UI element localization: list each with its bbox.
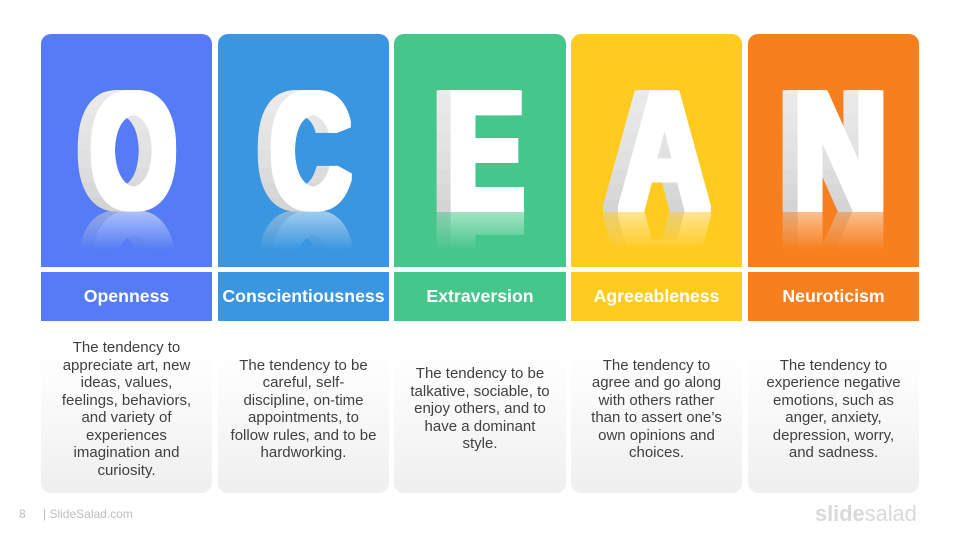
text block: Extraversion description: talkative, sociable, to bbox=[410, 383, 550, 400]
text block: Neuroticism description: and sadness. bbox=[789, 444, 878, 461]
text block: Neuroticism description: The tendency to bbox=[780, 356, 887, 374]
page number: 8 bbox=[19, 507, 26, 521]
text block: Extraversion description: have a dominant bbox=[425, 418, 535, 435]
letter C with reflection: C bbox=[270, 58, 351, 242]
letter N with reflection: N bbox=[793, 57, 888, 245]
text block: Agreeableness description: with others rather bbox=[599, 392, 714, 408]
text block: Agreeableness description: own opinions and bbox=[598, 426, 715, 444]
text block: Conscientiousness description: hardworking. bbox=[261, 444, 346, 461]
text block: Conscientiousness description: follow rules, and to be bbox=[231, 426, 376, 444]
text block: Openness description: appreciate art, new bbox=[63, 356, 190, 374]
text block: Conscientiousness description bbox=[218, 325, 389, 493]
text block: Openness description: imagination and bbox=[74, 444, 179, 461]
text block: Agreeableness description bbox=[571, 325, 742, 493]
heading: Openness bbox=[41, 272, 212, 321]
text block: Agreeableness description: choices. bbox=[629, 444, 684, 461]
text block: Openness description: and variety of bbox=[81, 409, 172, 426]
text block: Conscientiousness description: careful, self- bbox=[263, 374, 344, 391]
heading: Agreeableness bbox=[571, 272, 742, 321]
text block: Extraversion description: enjoy others, and to bbox=[414, 400, 546, 417]
text block: Extraversion description bbox=[394, 325, 566, 493]
letter A with reflection: A bbox=[619, 57, 710, 245]
panel: Openness letter card bbox=[41, 34, 212, 267]
panel: Extraversion letter card bbox=[394, 34, 566, 267]
text block: Openness description: The tendency to bbox=[73, 339, 180, 356]
text block: Extraversion description: The tendency to be bbox=[416, 365, 544, 382]
heading: Neuroticism bbox=[748, 272, 919, 321]
heading: Agreeableness: Agreeableness bbox=[594, 286, 719, 306]
panel: Agreeableness letter card bbox=[571, 34, 742, 267]
heading: Extraversion bbox=[394, 272, 566, 321]
heading: Conscientiousness: Conscientiousness bbox=[222, 286, 385, 306]
text block: Extraversion description: style. bbox=[462, 435, 498, 452]
text block: Openness description: ideas, values, bbox=[81, 374, 172, 391]
heading: Conscientiousness bbox=[218, 272, 389, 321]
text block: Neuroticism description: experience negative bbox=[766, 374, 901, 391]
text block: Neuroticism description: anger, anxiety, bbox=[785, 409, 882, 426]
text block: Neuroticism description: depression, worry, bbox=[773, 426, 894, 444]
text block: Agreeableness description: agree and go along bbox=[592, 374, 721, 391]
text block: Openness description bbox=[41, 325, 212, 493]
letter E with reflection: E bbox=[447, 57, 525, 245]
text block: Agreeableness description: than to assert one’s bbox=[591, 409, 722, 426]
text block: Conscientiousness description: appointments, to bbox=[248, 409, 359, 426]
text block: Conscientiousness description: discipline, on-time bbox=[243, 392, 364, 408]
text block: Neuroticism description: emotions, such as bbox=[773, 392, 894, 408]
text block: Agreeableness description: The tendency to bbox=[603, 356, 710, 374]
footer: source: | SlideSalad.com bbox=[43, 507, 133, 521]
text block: Conscientiousness description: The tendency to be bbox=[239, 356, 368, 374]
text block: Neuroticism description bbox=[748, 325, 919, 493]
text block: Openness description: experiences bbox=[86, 426, 167, 444]
logo: slidesalad: slidesalad bbox=[815, 501, 917, 526]
heading: Extraversion: Extraversion bbox=[426, 286, 534, 306]
panel: Conscientiousness letter card bbox=[218, 34, 389, 267]
text block: Openness description: curiosity. bbox=[97, 462, 156, 478]
heading: Neuroticism: Neuroticism bbox=[782, 286, 885, 306]
letter O with reflection: O bbox=[90, 58, 177, 242]
text block: Openness description: feelings, behaviors, bbox=[62, 392, 191, 408]
panel: Neuroticism letter card bbox=[748, 34, 919, 267]
heading: Openness: Openness bbox=[84, 286, 169, 306]
